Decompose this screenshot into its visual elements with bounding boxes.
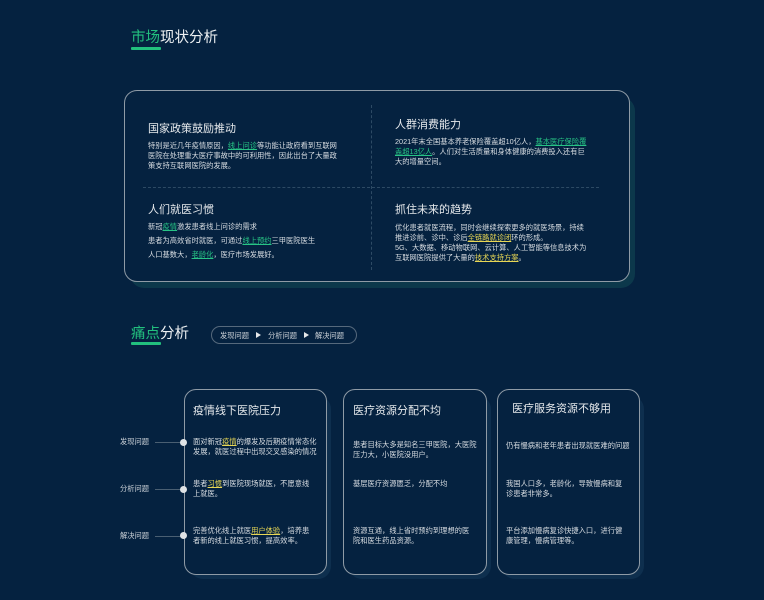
card: insufficient services: 仍有慢病和老年患者出现就医难的问题 — [506, 441, 630, 450]
block: future trends: 互联网医院提供了大量的技术支持方案。 — [395, 253, 526, 262]
row labels: 解决问题 — [120, 531, 149, 540]
title: pain point analysis: 痛点分析 — [131, 326, 189, 342]
block: medical habits: 新冠疫情激发患者线上问诊的需求 — [148, 222, 257, 231]
arrow — [304, 332, 309, 338]
dots — [180, 439, 187, 539]
card: resource allocation: 院和医生药品资源。 — [353, 536, 418, 545]
card: resource allocation — [343, 389, 487, 575]
block: consumption: 人群消费能力 — [395, 118, 461, 130]
card: resource allocation: 压力大，小医院没用户。 — [353, 450, 433, 459]
process pill — [211, 326, 357, 344]
card: insufficient services: 医疗服务资源不够用 — [512, 403, 611, 415]
title: market analysis: 市场现状分析 — [131, 30, 218, 46]
block: future trends: 5G、大数据、移动物联网、云计算、人工智能等信息技术为 — [395, 243, 586, 252]
block: national policy — [148, 122, 337, 170]
card: insufficient services: 康管理，慢病管理等。 — [506, 536, 579, 545]
block: future trends: 优化患者就医流程，同时会继续探索更多的就医场景，持续 — [395, 223, 584, 232]
block: medical habits — [148, 204, 315, 259]
card: hospital pressure: 完善优化线上就医用户体验，培养患 — [193, 526, 309, 535]
card: hospital pressure: 患者习惯到医院现场就医，不愿意线 — [193, 479, 309, 488]
divider: horizontal — [143, 187, 599, 188]
process pill: 发现问题 — [220, 331, 249, 340]
card: resource allocation: 资源互通，线上省时预约到理想的医 — [353, 526, 469, 535]
block: consumption: 大的增量空间。 — [395, 156, 446, 166]
card: hospital pressure: 疫情线下医院压力 — [193, 405, 281, 417]
process pill: 分析问题 — [268, 331, 297, 340]
block: medical habits: 人们就医习惯 — [148, 204, 214, 216]
block: medical habits: 患者为高效省时就医，可通过线上预约三甲医院医生 — [148, 236, 315, 245]
card: hospital pressure: 发展，就医过程中出现交叉感染的情况 — [193, 447, 317, 456]
card: resource allocation: 医疗资源分配不均 — [353, 405, 441, 417]
arrow — [256, 332, 261, 338]
card: insufficient services: 诊患者非常多。 — [506, 489, 557, 498]
block: consumption — [395, 118, 586, 166]
card: hospital pressure: 者新的线上就医习惯，提高效率。 — [193, 536, 302, 545]
process pill: 解决问题 — [315, 331, 344, 340]
block: consumption: 盖超13亿人。人们对生活质量和身体健康的消费投入还有巨 — [395, 146, 585, 156]
card: hospital pressure: 面对新冠疫情的爆发及后期疫情常态化 — [193, 437, 317, 446]
block: consumption: 2021年末全国基本养老保险覆盖超10亿人，基本医疗保险覆 — [395, 136, 586, 146]
block: national policy: 特别是近几年疫情原因，线上问诊等功能让政府看到互联网 — [148, 141, 337, 150]
card: hospital pressure — [184, 389, 327, 575]
card: hospital pressure: 上就医。 — [193, 489, 222, 498]
card: insufficient services: 平台添加慢病复诊快捷入口，进行健 — [506, 526, 622, 535]
block: future trends — [395, 204, 586, 262]
divider: vertical — [371, 105, 372, 270]
panel shadow — [130, 97, 635, 288]
card shadows — [190, 396, 331, 579]
card: resource allocation: 基层医疗资源匮乏，分配不均 — [353, 479, 447, 488]
card: resource allocation: 患者目标大多是知名三甲医院，大医院 — [353, 440, 477, 449]
block: national policy: 国家政策鼓励推动 — [148, 123, 236, 135]
block: national policy: 医院在处理重大医疗事故中的可利用性，因此出台了大量政 — [148, 151, 337, 160]
block: future trends: 抓住未来的趋势 — [395, 204, 472, 216]
row labels — [120, 437, 180, 540]
block: future trends: 推进诊前、诊中、诊后全链路就诊闭环的形成。 — [395, 233, 548, 242]
row labels: 发现问题 — [120, 437, 149, 446]
block: medical habits: 人口基数大，老龄化，医疗市场发展好。 — [148, 250, 279, 259]
panel: market analysis — [124, 90, 630, 282]
card: insufficient services: 我国人口多，老龄化，导致慢病和复 — [506, 479, 622, 488]
card: insufficient services — [497, 389, 640, 575]
block: national policy: 策支持互联网医院的发展。 — [148, 161, 235, 170]
row labels: 分析问题 — [120, 484, 149, 493]
